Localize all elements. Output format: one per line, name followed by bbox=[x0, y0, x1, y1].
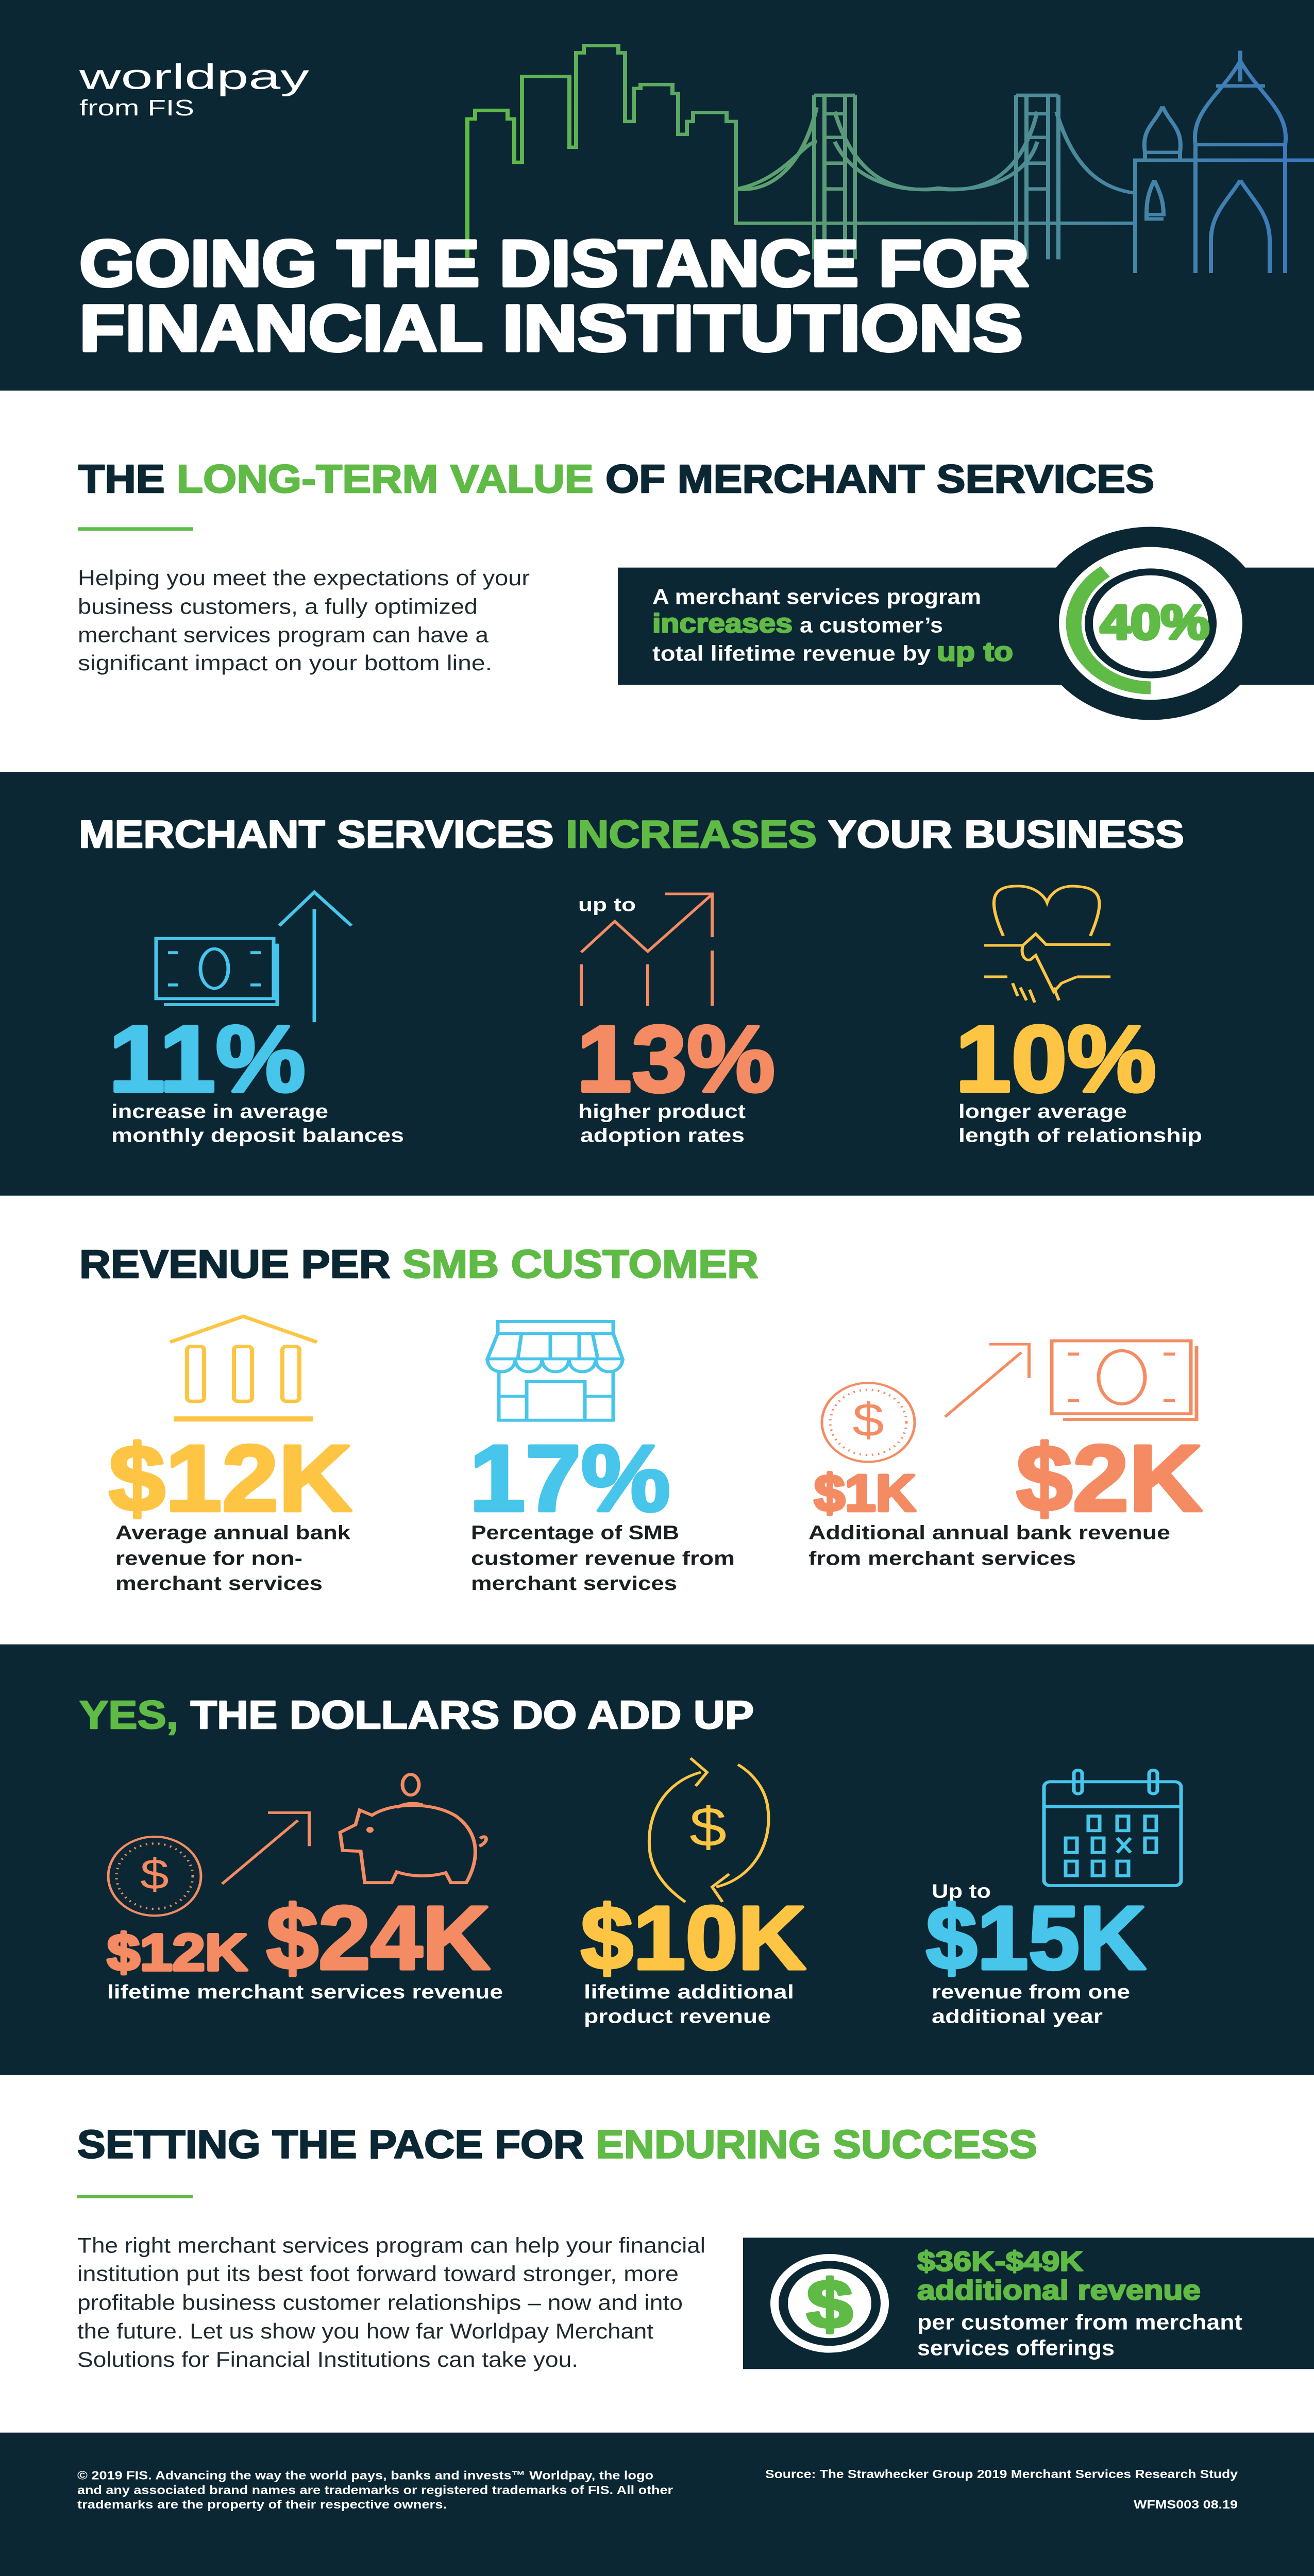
stat: $15K one additional year: revenue from one bbox=[932, 1981, 1130, 2003]
stat: $12K non-merchant revenue: merchant services bbox=[115, 1572, 323, 1594]
heading: yes, the dollars do add up: YES, THE DOLLARS DO ADD UP bbox=[79, 1692, 754, 1737]
callout: 40% lifetime revenue bbox=[618, 527, 1314, 720]
icon: coin, arrow and bill bbox=[822, 1341, 1197, 1462]
stat: $1K to $2K merchant revenue: $ bbox=[852, 1394, 884, 1446]
stat: $12K to $24K lifetime merchant revenue: lifetime merchant services revenue bbox=[107, 1981, 503, 2003]
footer legal text: trademarks are the property of their respective owners. bbox=[77, 2498, 447, 2512]
closing paragraph: the future. Let us show you how far Worldpay Merchant bbox=[77, 2319, 653, 2343]
stat: $1K to $2K merchant revenue: $1K bbox=[814, 1465, 916, 1522]
skyline illustration bbox=[467, 45, 1314, 273]
stat: $15K one additional year: additional year bbox=[932, 2005, 1103, 2027]
footer source and code: WFMS003 08.19 bbox=[1134, 2498, 1238, 2512]
heading: revenue per SMB customer: REVENUE PER SMB CUSTOMER bbox=[79, 1242, 759, 1286]
heading: long-term value: THE LONG-TERM VALUE OF MERCHANT SERVICES bbox=[78, 456, 1154, 501]
callout: 40% lifetime revenue: up to bbox=[937, 637, 1013, 667]
icon: cash with up arrow bbox=[156, 892, 351, 1022]
callout: 40% lifetime revenue: total lifetime revenue by bbox=[652, 641, 931, 666]
callout: $36K-$49K additional revenue: services offerings bbox=[917, 2336, 1115, 2360]
stat: 17% SMB revenue: Percentage of SMB bbox=[471, 1521, 679, 1544]
stat: $12K to $24K lifetime merchant revenue: $12K bbox=[107, 1924, 247, 1981]
stat: $10K lifetime product revenue bbox=[581, 1758, 806, 2027]
intro paragraph: business customers, a fully optimized bbox=[78, 595, 478, 619]
heading: long-term value bbox=[78, 456, 1154, 531]
stat: $10K lifetime product revenue: lifetime additional bbox=[584, 1981, 794, 2003]
logo: worldpay from FIS bbox=[79, 57, 309, 121]
stat: $10K lifetime product revenue: product revenue bbox=[584, 2005, 771, 2027]
stat: 17% SMB revenue bbox=[469, 1321, 735, 1594]
icon: circular dollar arrows bbox=[649, 1758, 769, 1902]
callout: 40% lifetime revenue: increases bbox=[652, 608, 793, 638]
closing paragraph: The right merchant services program can help your financial bbox=[77, 2233, 705, 2258]
stat: 13% product adoption: up to bbox=[578, 894, 636, 915]
icon: bank bbox=[170, 1316, 317, 1401]
closing paragraph: profitable business customer relationships – now and into bbox=[77, 2290, 683, 2314]
stat: 11% deposit balances: 11% bbox=[109, 1006, 306, 1111]
icon: 40% ring: 40% bbox=[1100, 596, 1209, 649]
stat: 10% relationship length: 10% bbox=[955, 1006, 1156, 1111]
icon: 40% ring bbox=[1035, 527, 1267, 720]
stat: $10K lifetime product revenue: $ bbox=[689, 1796, 727, 1858]
callout: 40% lifetime revenue: a customer’s bbox=[800, 613, 943, 637]
intro paragraph: significant impact on your bottom line. bbox=[78, 651, 492, 675]
stat: 13% product adoption: higher product bbox=[578, 1100, 746, 1122]
logo: worldpay from FIS: from FIS bbox=[79, 96, 194, 121]
stat: $15K one additional year bbox=[926, 1770, 1181, 2027]
title bbox=[79, 227, 1029, 365]
stat: 11% deposit balances: monthly deposit balances bbox=[111, 1124, 404, 1146]
stat: 11% deposit balances bbox=[109, 892, 404, 1146]
icon: dollar badge: $ bbox=[807, 2266, 852, 2343]
callout: $36K-$49K additional revenue: additional revenue bbox=[917, 2275, 1201, 2306]
stat: 13% product adoption bbox=[577, 894, 775, 1146]
heading: setting the pace: SETTING THE PACE FOR ENDURING SUCCESS bbox=[77, 2122, 1037, 2166]
intro paragraph bbox=[78, 566, 530, 675]
stat: $1K to $2K merchant revenue: from merchant services bbox=[808, 1547, 1076, 1569]
stat: $1K to $2K merchant revenue bbox=[808, 1341, 1202, 1569]
footer legal text: © 2019 FIS. Advancing the way the world pays, banks and invests™ Worldpay, the logo bbox=[77, 2469, 653, 2482]
stat: 10% relationship length: length of relationship bbox=[958, 1124, 1202, 1146]
stat: $1K to $2K merchant revenue: Additional annual bank revenue bbox=[808, 1521, 1170, 1544]
stat: 13% product adoption: 13% bbox=[577, 1006, 775, 1111]
stat: $15K one additional year: $15K bbox=[926, 1887, 1146, 1988]
stat: $12K non-merchant revenue: revenue for non- bbox=[115, 1547, 302, 1569]
title: GOING THE DISTANCE FOR bbox=[79, 227, 1029, 300]
stat: 11% deposit balances: increase in average bbox=[111, 1100, 328, 1122]
footer source and code bbox=[765, 2468, 1238, 2512]
footer legal text bbox=[77, 2469, 673, 2512]
callout: $36K-$49K additional revenue: per customer from merchant bbox=[917, 2310, 1242, 2334]
stat: $12K to $24K lifetime merchant revenue bbox=[107, 1774, 503, 2003]
stat: 10% relationship length: longer average bbox=[958, 1100, 1127, 1122]
icon: heart and handshake bbox=[984, 886, 1110, 1003]
closing paragraph: Solutions for Financial Institutions can take you. bbox=[77, 2347, 578, 2371]
intro paragraph: merchant services program can have a bbox=[78, 623, 488, 647]
logo: worldpay from FIS: worldpay bbox=[79, 57, 309, 96]
closing paragraph bbox=[77, 2233, 705, 2371]
callout: 40% lifetime revenue: A merchant services program bbox=[652, 584, 981, 609]
icon: storefront bbox=[487, 1321, 622, 1420]
stat: $1K to $2K merchant revenue: $2K bbox=[1016, 1426, 1202, 1531]
stat: $12K non-merchant revenue: Average annual bank bbox=[115, 1521, 350, 1544]
icon: growth chart bbox=[581, 894, 712, 1006]
intro paragraph: Helping you meet the expectations of your bbox=[78, 566, 530, 590]
callout: $36K-$49K additional revenue: $36K-$49K bbox=[917, 2246, 1083, 2277]
stat: $10K lifetime product revenue: $10K bbox=[581, 1887, 806, 1988]
stat: $15K one additional year: Up to bbox=[932, 1880, 991, 1902]
stat: $12K non-merchant revenue bbox=[109, 1316, 352, 1594]
footer source and code: Source: The Strawhecker Group 2019 Merchant Services Research Study bbox=[765, 2468, 1238, 2481]
heading: setting the pace bbox=[77, 2122, 1037, 2198]
callout: $36K-$49K additional revenue bbox=[743, 2238, 1314, 2369]
stat: 10% relationship length bbox=[955, 886, 1202, 1146]
stat: $12K to $24K lifetime merchant revenue: $ bbox=[140, 1851, 169, 1899]
footer legal text: and any associated brand names are trademarks or registered trademarks of FIS. All other bbox=[77, 2484, 673, 2497]
stat: $12K non-merchant revenue: $12K bbox=[109, 1426, 352, 1531]
stat: 17% SMB revenue: customer revenue from bbox=[471, 1547, 735, 1569]
heading: increases your business: MERCHANT SERVICES INCREASES YOUR BUSINESS bbox=[79, 812, 1184, 856]
stat: 13% product adoption: adoption rates bbox=[580, 1124, 745, 1146]
closing paragraph: institution put its best foot forward toward stronger, more bbox=[77, 2261, 679, 2286]
stat: 17% SMB revenue: merchant services bbox=[471, 1572, 677, 1594]
icon: calendar bbox=[1044, 1770, 1181, 1886]
icon: coin, arrow, piggy bank bbox=[108, 1774, 486, 1916]
stat: 17% SMB revenue: 17% bbox=[469, 1426, 670, 1531]
title: FINANCIAL INSTITUTIONS bbox=[79, 292, 1023, 365]
stat: $12K to $24K lifetime merchant revenue: $24K bbox=[266, 1887, 490, 1988]
icon: dollar badge bbox=[774, 2258, 885, 2349]
